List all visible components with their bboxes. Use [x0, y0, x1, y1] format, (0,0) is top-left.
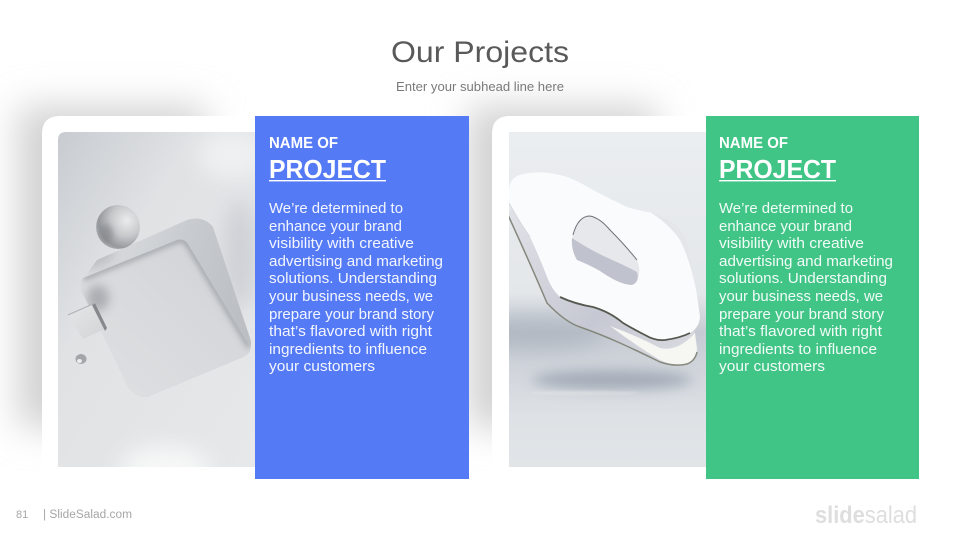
cube body: [111, 218, 251, 382]
panel body text: [719, 200, 893, 375]
panel body text: advertising and marketing: [719, 253, 893, 270]
small cube: [82, 304, 100, 338]
panel: project one: [42, 116, 469, 490]
panel body text: that’s flavored with right: [719, 323, 883, 340]
panel: project two: [465, 116, 919, 479]
panel heading: NAME OF: [719, 135, 788, 152]
blue panel: [255, 116, 469, 479]
panel body text: solutions. Understanding: [719, 270, 887, 287]
panel body text: prepare your brand story: [269, 306, 434, 323]
panel heading: [269, 135, 386, 184]
shadow: project two card: [468, 106, 656, 428]
panel body text: prepare your brand story: [719, 306, 884, 323]
lower layer: [509, 208, 697, 362]
title: Our Projects: [391, 36, 569, 69]
panel body text: enhance your brand: [719, 218, 852, 235]
panel body text: solutions. Understanding: [269, 270, 437, 287]
panel body text: that’s flavored with right: [269, 323, 433, 340]
shadow: project one card: [18, 106, 206, 428]
upper layer: [509, 172, 700, 340]
white card: [492, 116, 712, 479]
shape opening: [572, 216, 640, 278]
subhead: Enter your subhead line here: [396, 79, 564, 94]
panel body text: your business needs, we: [269, 288, 433, 305]
footer site name: | SlideSalad.com: [43, 509, 132, 521]
image: abstract cube: [58, 132, 255, 467]
sphere: [96, 205, 140, 249]
panel body text: your business needs, we: [719, 288, 883, 305]
page number: 81: [16, 509, 28, 521]
panel body text: [269, 200, 443, 375]
panel body text: visibility with creative: [719, 235, 864, 252]
footer logo: slidesalad: [815, 502, 917, 529]
panel body text: your customers: [269, 358, 375, 375]
panel heading: [719, 135, 836, 184]
panel heading: PROJECT: [719, 154, 836, 184]
panel heading: NAME OF: [269, 135, 338, 152]
panel body text: ingredients to influence: [269, 341, 427, 358]
white card: [42, 116, 262, 479]
panel body text: your customers: [719, 358, 825, 375]
panel heading: PROJECT: [269, 154, 386, 184]
panel body text: advertising and marketing: [269, 253, 443, 270]
image: abstract glass shape: [509, 132, 706, 467]
panel body text: ingredients to influence: [719, 341, 877, 358]
panel body text: We’re determined to: [269, 200, 403, 217]
small dot: [76, 354, 86, 364]
panel body text: enhance your brand: [269, 218, 402, 235]
green panel: [706, 116, 919, 479]
panel body text: visibility with creative: [269, 235, 414, 252]
panel body text: We’re determined to: [719, 200, 853, 217]
